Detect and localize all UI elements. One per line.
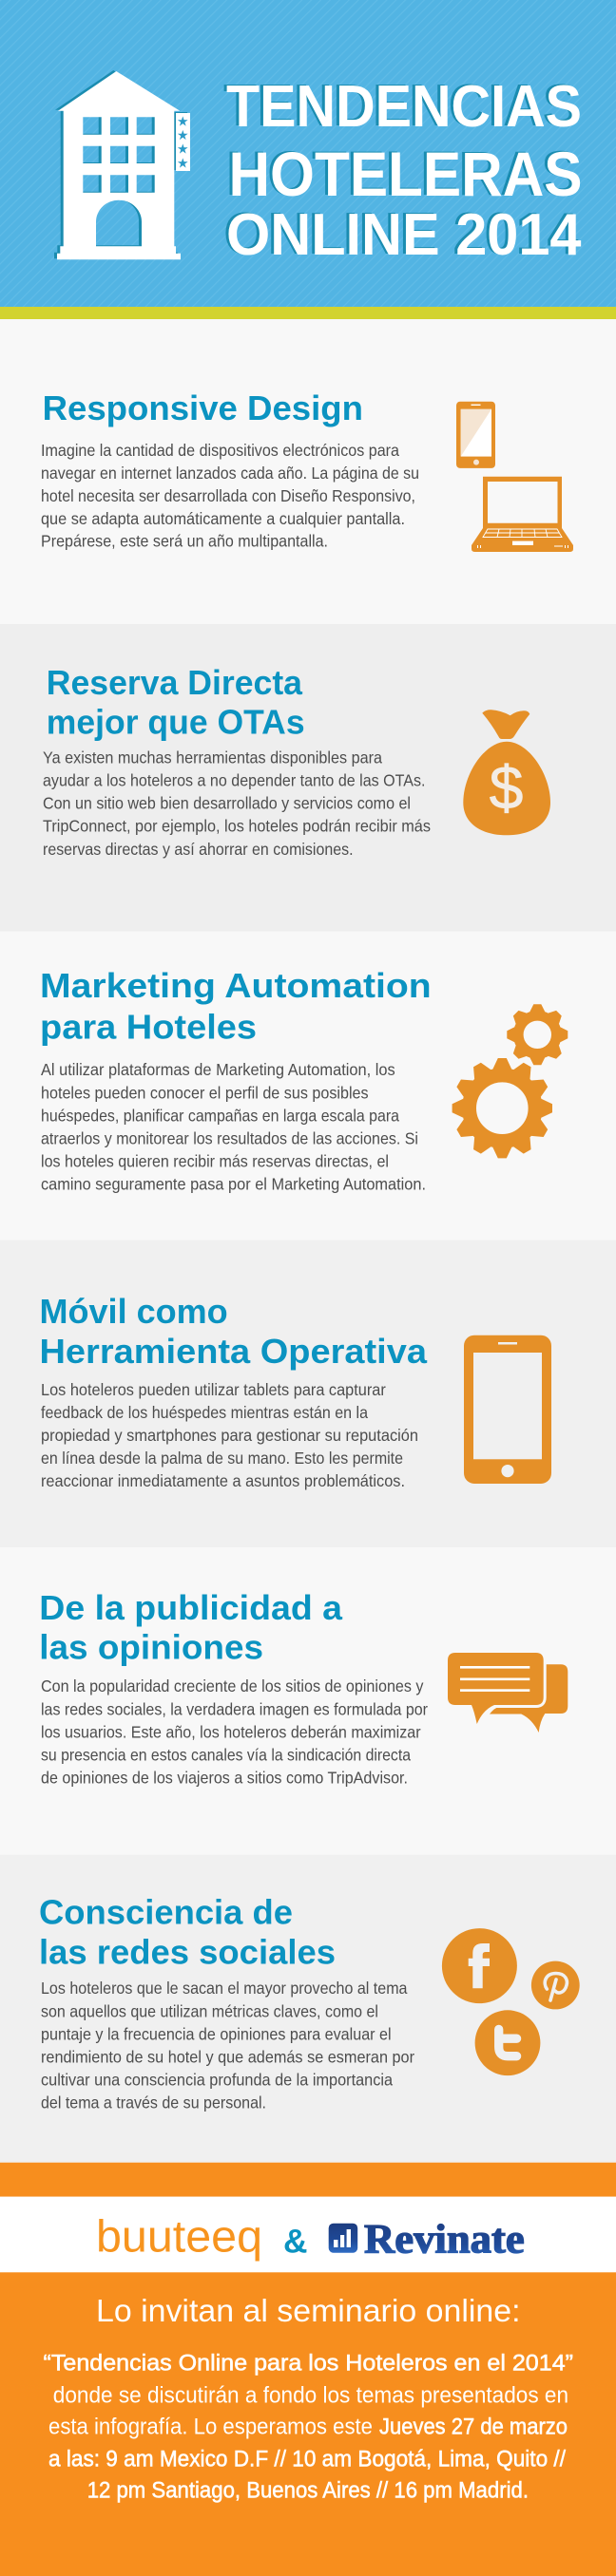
text block: los hoteles quieren recibir más reservas directas, el xyxy=(41,1152,389,1171)
icon: hotel stars: ★ xyxy=(177,128,189,143)
title xyxy=(226,74,582,268)
icon: hotel stars: ★ xyxy=(177,114,189,129)
heading: Móvil como xyxy=(40,1292,228,1331)
text block: Al utilizar plataformas de Marketing Automation, los xyxy=(41,1060,395,1079)
text block xyxy=(41,441,419,551)
text block: los usuarios. Este año, los hoteleros deberán maximizar xyxy=(41,1722,421,1741)
text block: Imagine la cantidad de dispositivos electrónicos para xyxy=(41,441,399,460)
icon: hotel stars xyxy=(177,114,189,171)
text block: navegar en internet lanzados cada año. La página de su xyxy=(41,464,419,483)
title: HOTELERAS xyxy=(228,139,582,209)
heading: las opiniones xyxy=(39,1628,263,1666)
heading: invitation: Lo invitan al seminario online: xyxy=(96,2293,521,2328)
icon: smartphone xyxy=(456,402,495,468)
icon: large smartphone xyxy=(464,1335,551,1484)
text block: Los hoteleros que le sacan el mayor provecho al tema xyxy=(41,1979,408,1998)
text block xyxy=(41,1676,428,1788)
icon: twitter xyxy=(475,2010,540,2075)
text block: feedback de los huéspedes mientras están en la xyxy=(41,1403,368,1422)
text block: seminar details xyxy=(44,2350,573,2504)
icon: large gear xyxy=(452,1058,552,1158)
text block: rendimiento de su hotel y que además se esmeran por xyxy=(41,2047,414,2066)
panel: movil como herramienta operativa xyxy=(0,1241,616,1547)
text block: seminar details: a las: 9 am Mexico D.F // 10 am Bogotá, Lima, Quito // xyxy=(48,2446,566,2472)
text block: del tema a través de su personal. xyxy=(41,2093,266,2112)
text block: Con la popularidad creciente de los sitios de opiniones y xyxy=(41,1676,424,1695)
text block: seminar details: esta infografía. Lo esperamos este xyxy=(48,2415,373,2440)
heading: las redes sociales xyxy=(39,1932,336,1971)
text block: Los hoteleros pueden utilizar tablets para capturar xyxy=(41,1380,386,1399)
text block: atraerlos y monitorear los resultados de las acciones. Si xyxy=(41,1128,418,1147)
ampersand: & xyxy=(283,2224,308,2261)
panel: responsive design xyxy=(0,319,616,624)
text block: Con un sitio web bien desarrollado y servicios como el xyxy=(43,794,411,813)
heading xyxy=(39,1588,343,1666)
text block: su presencia en estos canales vía la sindicación directa xyxy=(41,1746,411,1765)
title: TENDENCIAS xyxy=(226,74,582,140)
heading: Responsive Design xyxy=(43,388,363,427)
text block xyxy=(41,1979,414,2112)
panel: header xyxy=(0,0,616,307)
heading: mejor que OTAs xyxy=(47,702,305,741)
logo: revinate wordmark: Revinate xyxy=(364,2218,525,2263)
text block: en línea desde la palma de su mano. Esto les permite xyxy=(41,1449,403,1468)
text block: hotel necesita ser desarrollada con Diseño Responsivo, xyxy=(41,486,415,505)
heading: para Hoteles xyxy=(40,1007,257,1047)
logo: revinate icon xyxy=(329,2224,357,2253)
panel: de la publicidad a las opiniones xyxy=(0,1547,616,1855)
text block xyxy=(43,748,431,859)
heading: Consciencia de xyxy=(39,1892,293,1931)
heading: De la publicidad a xyxy=(39,1588,343,1627)
text block: cultivar una consciencia profunda de la importancia xyxy=(41,2071,393,2090)
text block: de opiniones de los viajeros a sitios como TripAdvisor. xyxy=(41,1769,408,1788)
text block: camino seguramente pasa por el Marketing Automation. xyxy=(41,1175,426,1194)
text block: las redes sociales, la verdadera imagen es formulada por xyxy=(41,1699,428,1718)
panel: seminar invitation xyxy=(0,2272,616,2576)
icon: facebook xyxy=(442,1928,517,2003)
heading: Marketing Automation xyxy=(40,966,432,1005)
icon: pinterest xyxy=(531,1961,580,2009)
logo: buuteeq: buuteeq xyxy=(96,2211,262,2262)
icon: money bag: $ xyxy=(490,754,523,823)
heading: Herramienta Operativa xyxy=(40,1332,428,1371)
text block: seminar details: “Tendencias Online para los Hoteleros en el 2014” xyxy=(44,2350,573,2376)
icon: hotel building xyxy=(57,71,190,259)
text block xyxy=(41,1380,418,1490)
icon: chat bubbles xyxy=(448,1653,568,1733)
icon: hotel stars: ★ xyxy=(177,156,189,171)
green divider band xyxy=(0,307,616,319)
icon: money bag xyxy=(463,710,550,835)
panel: marketing automation xyxy=(0,931,616,1241)
text block: ayudar a los hoteleros a no depender tanto de las OTAs. xyxy=(43,771,426,790)
text block: propiedad y smartphones para gestionar su reputación xyxy=(41,1426,418,1445)
orange band xyxy=(0,2163,616,2197)
panel: reserva directa xyxy=(0,624,616,931)
heading xyxy=(39,1892,336,1971)
text block: reservas directas y así ahorrar en comisiones. xyxy=(43,840,354,859)
text block: puntaje y la frecuencia de opiniones para evaluar el xyxy=(41,2024,392,2043)
text block: son aquellos que utilizan métricas claves, como el xyxy=(41,2001,378,2020)
heading xyxy=(40,966,432,1047)
heading xyxy=(40,1292,428,1371)
text block: huéspedes, planificar campañas en larga escala para xyxy=(41,1106,399,1125)
panel: consciencia de las redes sociales xyxy=(0,1855,616,2163)
icon: laptop xyxy=(472,477,573,552)
text block: seminar details: 12 pm Santiago, Buenos Aires // 16 pm Madrid. xyxy=(87,2478,529,2504)
icon: small gear xyxy=(507,1004,568,1065)
text block: Prepárese, este será un año multipantalla. xyxy=(41,532,328,551)
text block xyxy=(41,1060,426,1194)
text block: que se adapta automáticamente a cualquier pantalla. xyxy=(41,509,405,528)
text block: reaccionar inmediatamente a asuntos problemáticos. xyxy=(41,1471,405,1490)
text block: hoteles pueden conocer el perfil de sus posibles xyxy=(41,1083,369,1102)
panel: partner logos xyxy=(0,2197,616,2272)
icon: hotel stars: ★ xyxy=(177,142,189,158)
text block: TripConnect, por ejemplo, los hoteles podrán recibir más xyxy=(43,817,431,836)
text block: seminar details: Jueves 27 de marzo xyxy=(379,2415,568,2440)
heading xyxy=(47,663,305,741)
text block: seminar details: donde se discutirán a fondo los temas presentados en xyxy=(53,2382,568,2408)
text block: Ya existen muchas herramientas disponibles para xyxy=(43,748,382,767)
heading: Reserva Directa xyxy=(47,663,303,702)
title: ONLINE 2014 xyxy=(226,202,582,268)
